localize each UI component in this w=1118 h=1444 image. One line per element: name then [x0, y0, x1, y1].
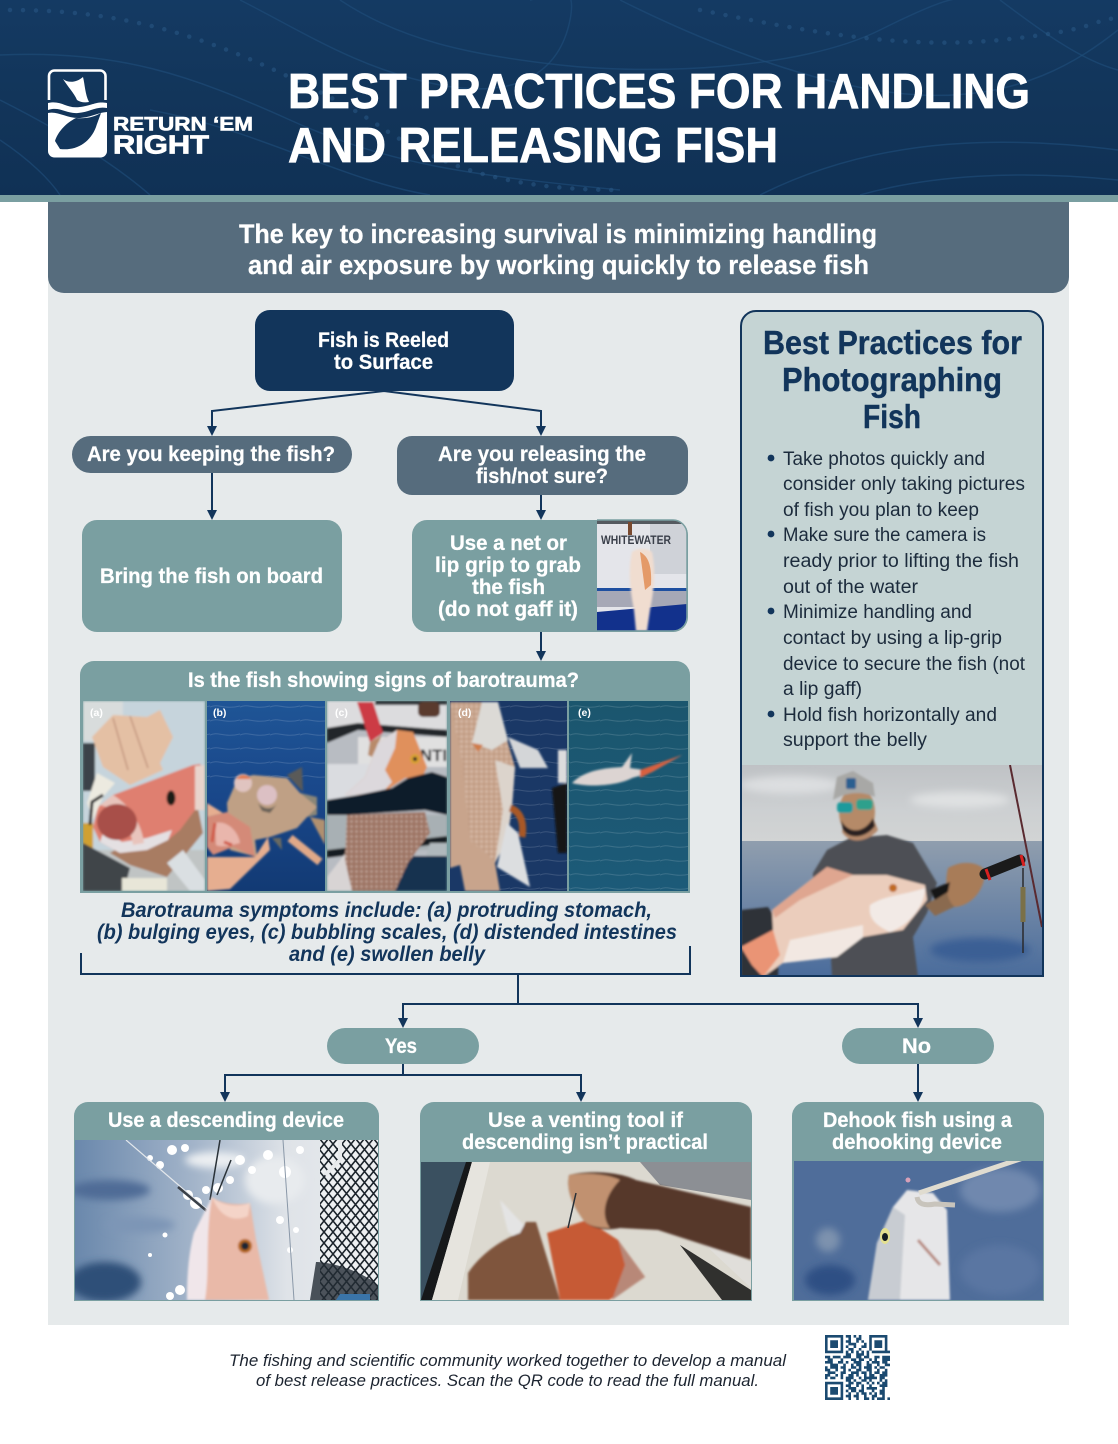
panel heading: Best Practices for — [763, 324, 1022, 361]
photo letters: (c) — [335, 707, 348, 719]
footer note — [229, 1351, 787, 1390]
barotrauma symptoms text: and (e) swollen belly — [289, 943, 486, 966]
pill: no: No — [902, 1035, 931, 1058]
panel heading: Fish — [863, 398, 921, 435]
box: are you releasing the fish: Are you releasing the — [438, 443, 646, 466]
QR code — [825, 1336, 890, 1399]
bullet list: consider only taking pictures — [783, 474, 1025, 495]
photo: dehooking device — [794, 1158, 1043, 1300]
box: bring the fish on board — [82, 520, 342, 632]
barotrauma symptoms text: Barotrauma symptoms include: (a) protruding stomach, — [121, 899, 652, 922]
photo: venting a fish — [421, 1162, 751, 1300]
photo letters: (e) — [578, 707, 591, 719]
box: are you releasing the fish: fish/not sure? — [476, 465, 608, 488]
pill: no — [842, 1028, 994, 1064]
key message banner: and air exposure by working quickly to release fish — [248, 250, 869, 280]
panel: barotrauma signs — [80, 661, 690, 893]
bullet list: a lip gaff) — [783, 679, 862, 700]
flow box: fish is reeled to surface: to Surface — [334, 351, 433, 374]
photo: fish on lip grip at boat — [597, 520, 688, 632]
logo wordmark: RETURN ‘EM — [113, 114, 253, 136]
title — [288, 65, 1030, 173]
bullet list: Take photos quickly and — [783, 449, 985, 470]
bullet list: of fish you plan to keep — [783, 500, 979, 521]
bullet list: out of the water — [783, 577, 919, 598]
box: use a net or lip grip: Use a net or — [450, 532, 567, 555]
bullet list: Make sure the camera is — [783, 525, 986, 546]
photo e: swollen belly — [569, 701, 688, 891]
pill: yes: Yes — [385, 1035, 417, 1058]
photo: angler holding red snapper — [740, 765, 1043, 977]
footer note: of best release practices. Scan the QR code to read the full manual. — [256, 1371, 759, 1390]
card: use a descending device: Use a descending device — [108, 1109, 344, 1132]
card: dehook fish — [792, 1102, 1044, 1301]
bullet list — [768, 449, 1026, 751]
bullet list: Minimize handling and — [783, 602, 972, 623]
key message banner: The key to increasing survival is minimizing handling — [239, 219, 877, 249]
title: BEST PRACTICES FOR HANDLING — [288, 65, 1030, 119]
panel: barotrauma signs: Is the fish showing signs of barotrauma? — [188, 669, 579, 692]
main light panel — [48, 270, 1069, 1325]
box: use a net or lip grip — [412, 520, 688, 632]
bullet list: device to secure the fish (not — [783, 654, 1026, 675]
barotrauma symptoms text — [97, 899, 677, 966]
card: dehook fish: Dehook fish using a — [823, 1109, 1012, 1132]
barotrauma symptoms text: (b) bulging eyes, (c) bubbling scales, (d) distended intestines — [97, 921, 677, 944]
card: dehook fish: dehooking device — [832, 1131, 1002, 1154]
photo d: distended intestines — [450, 701, 567, 891]
box: use a net or lip grip: the fish — [472, 576, 545, 599]
header band — [0, 0, 1118, 202]
bullet list: ready prior to lifting the fish — [783, 551, 1019, 572]
box: use a net or lip grip: (do not gaff it) — [438, 598, 578, 621]
arrow: net to barotrauma — [536, 632, 546, 661]
flow box: fish is reeled to surface: Fish is Reeled — [318, 329, 449, 352]
bracket and branching arrows to yes / no — [81, 946, 923, 1028]
panel heading — [763, 324, 1022, 435]
arrow: releasing to net — [536, 495, 546, 520]
arrows from first box — [207, 391, 546, 436]
arrows from yes — [220, 1064, 586, 1102]
arrow: keeping to on board — [207, 473, 217, 520]
bullet list: support the belly — [783, 730, 928, 751]
card: use a venting tool: descending isn’t practical — [462, 1131, 708, 1154]
logo icon — [48, 70, 107, 158]
photo c: bubbling scales — [327, 701, 447, 891]
photo letters: (d) — [458, 707, 471, 719]
key message banner — [48, 202, 1069, 293]
panel heading: Photographing — [782, 361, 1002, 398]
pill: are you keeping the fish — [72, 436, 352, 473]
card: use a venting tool — [420, 1102, 752, 1301]
box: bring the fish on board: Bring the fish on board — [100, 565, 323, 588]
card: use a venting tool: Use a venting tool if — [488, 1109, 684, 1132]
photo letters: (b) — [213, 707, 226, 719]
footer note: The fishing and scientific community worked together to develop a manual — [229, 1351, 787, 1370]
photo c: bubbling scales: NTI — [420, 746, 447, 765]
photo a: protruding stomach — [83, 701, 205, 891]
title: AND RELEASING FISH — [288, 119, 778, 173]
box: are you releasing the fish — [397, 436, 688, 495]
photo letters — [90, 707, 591, 719]
pill: are you keeping the fish: Are you keeping the fish? — [87, 443, 335, 466]
logo wordmark — [113, 114, 253, 160]
flow box: fish is reeled to surface — [255, 310, 514, 391]
card: use a descending device — [69, 1102, 379, 1302]
arrow from no — [913, 1064, 923, 1102]
photo letters: (a) — [90, 707, 103, 719]
panel: best practices for photographing fish — [740, 311, 1043, 977]
logo: Return 'Em Right — [48, 70, 253, 160]
bullet list: Hold fish horizontally and — [783, 705, 997, 726]
photo: fish on lip grip at boat: WHITEWATER — [601, 535, 672, 547]
logo wordmark: RIGHT — [113, 132, 210, 160]
pill: yes — [327, 1028, 479, 1064]
photo: fish on descending device — [69, 1140, 378, 1302]
photo b: bulging eyes — [207, 701, 325, 891]
box: use a net or lip grip: lip grip to grab — [435, 554, 581, 577]
bullet list: contact by using a lip-grip — [783, 628, 1002, 649]
